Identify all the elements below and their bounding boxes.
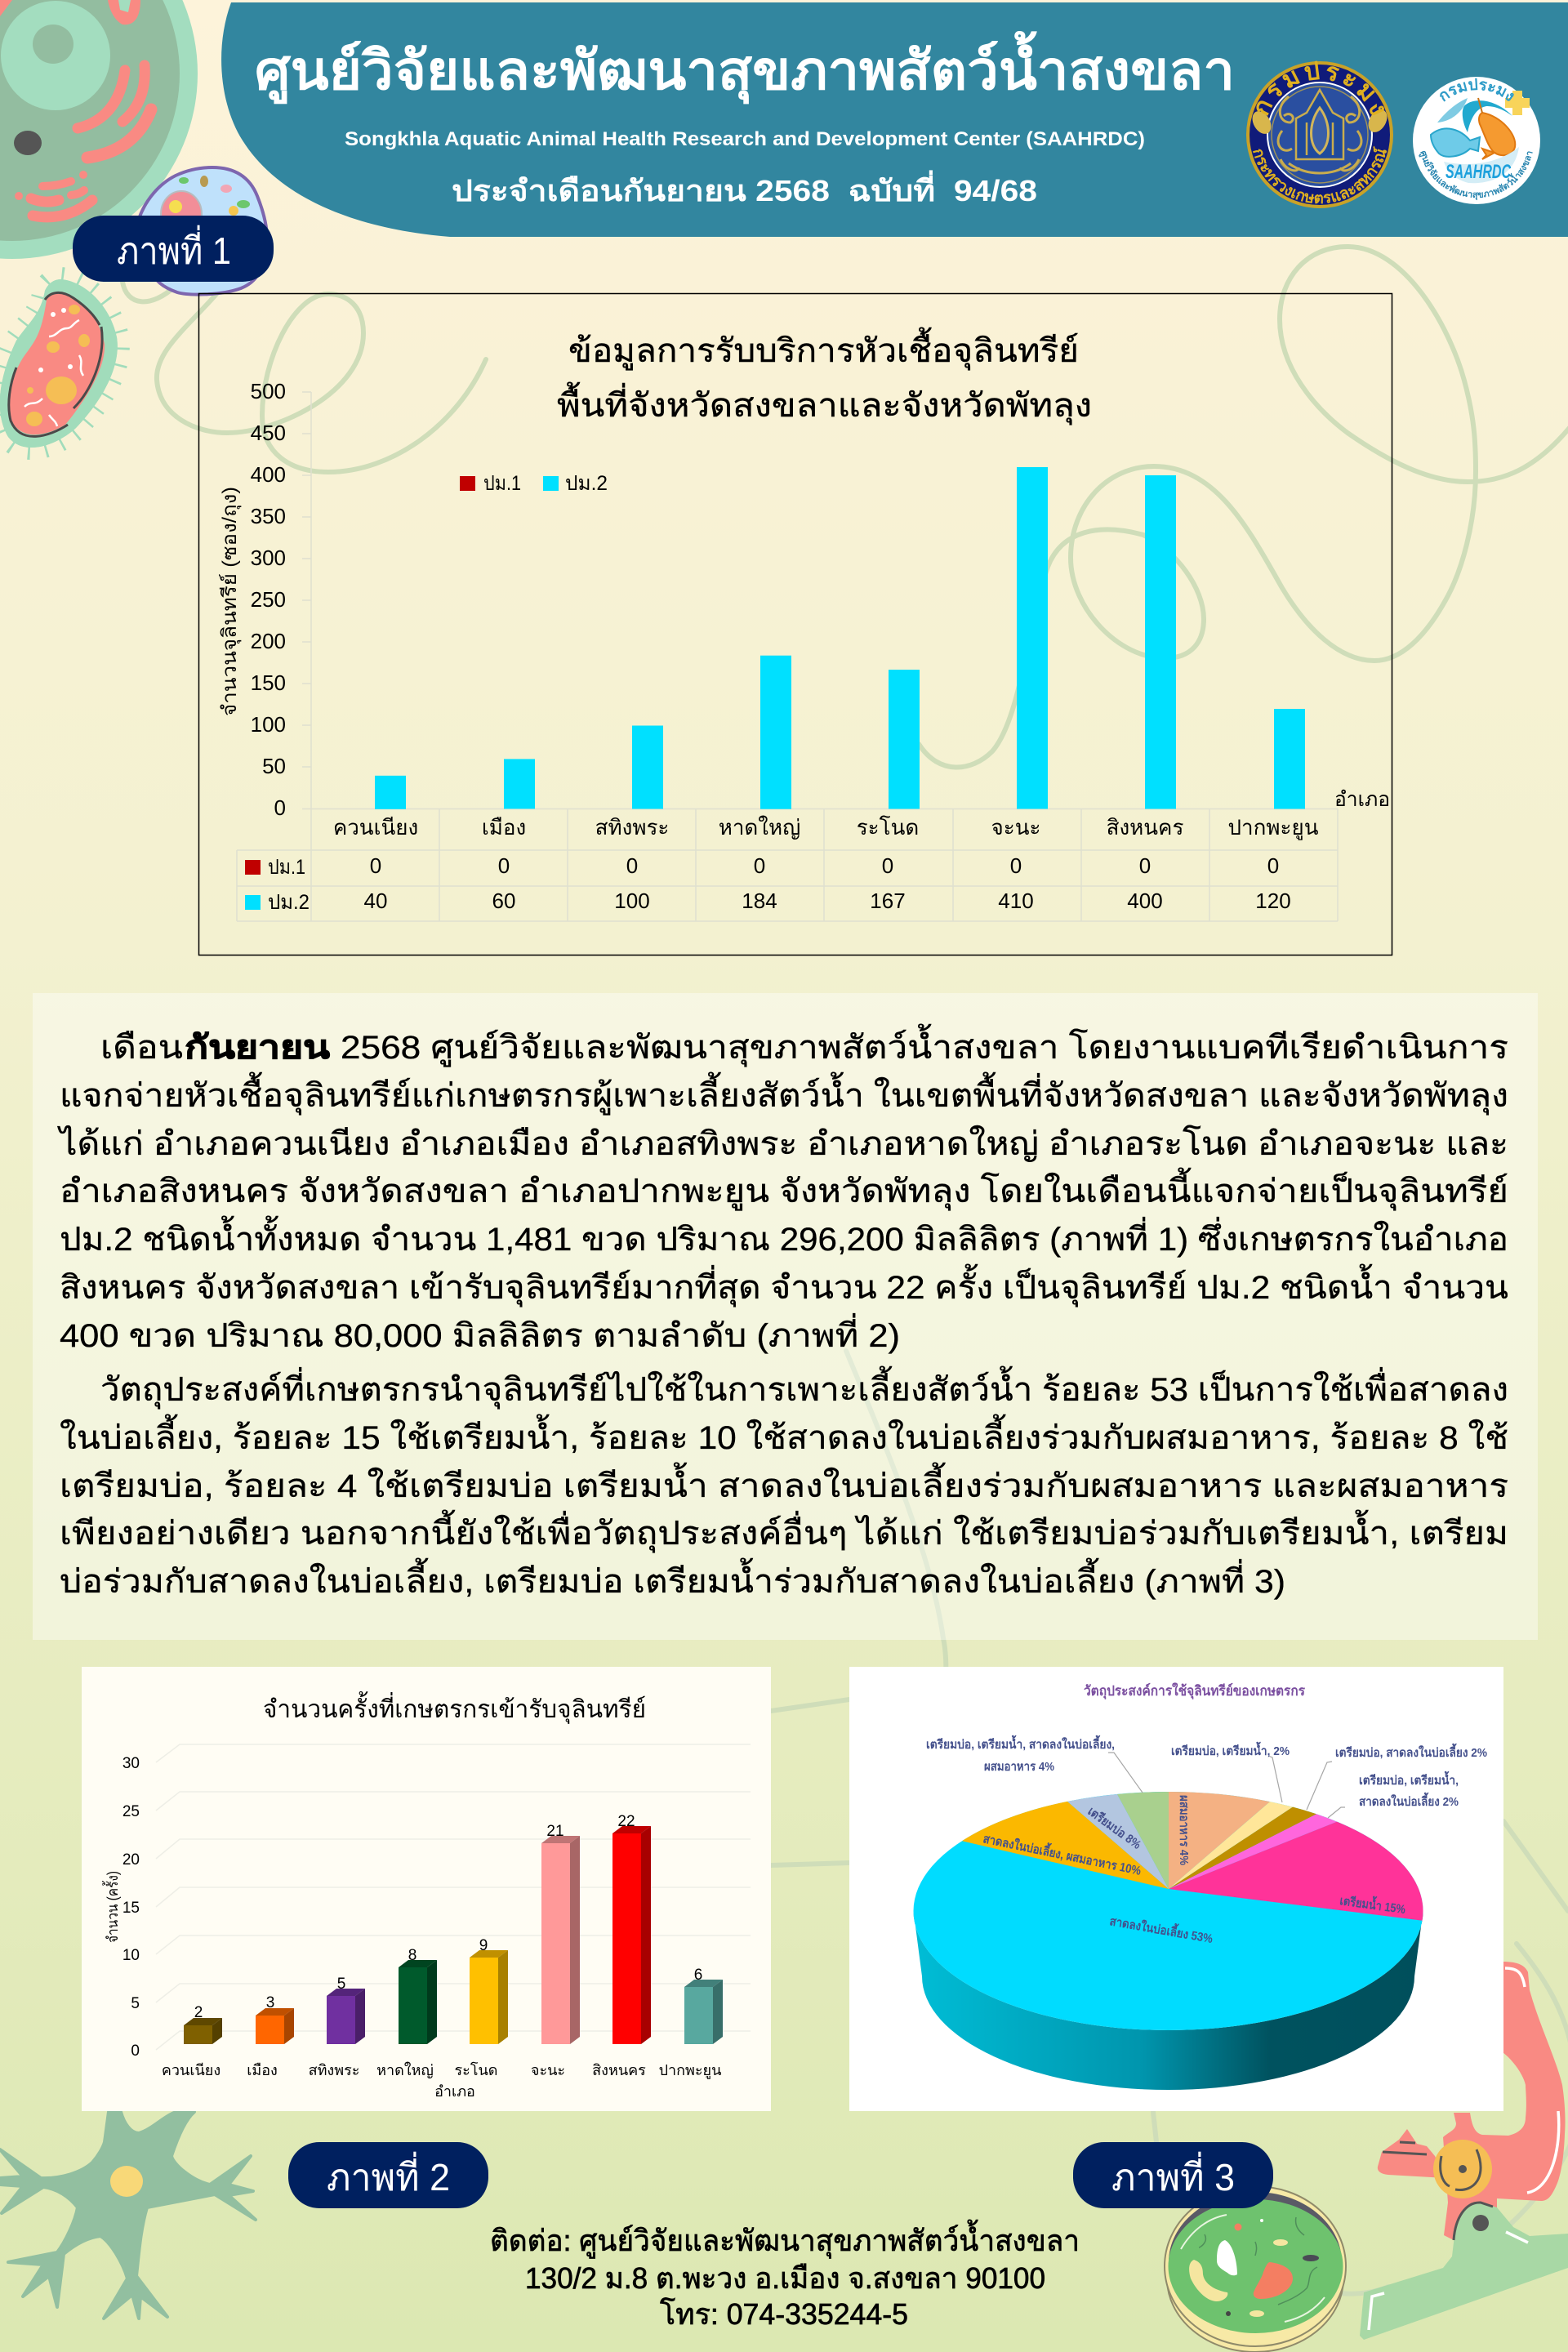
- badge: figure 1: [73, 216, 274, 282]
- logo: SAAHRDC: [1413, 77, 1540, 204]
- paragraph 1: 400 ขวด ปริมาณ 80,000 มิลลิลิตร ตามลำดับ (ภาพที่ 2): [60, 1313, 900, 1354]
- value labels: 2: [194, 2004, 203, 2021]
- logo: department of fisheries: กระทรวงเกษตรและสหกรณ์: [1253, 145, 1387, 204]
- bar: หาดใหญ่ 8: [399, 1960, 437, 2044]
- value labels: 8: [408, 1947, 416, 1964]
- panel: narrative text: [33, 993, 1538, 1640]
- bar: จะนะ 21: [541, 1836, 580, 2044]
- data table: ระโนด: [857, 815, 919, 840]
- paragraph 2: บ่อร่วมกับสาดลงในบ่อเลี้ยง, เตรียมบ่อ เตรียมน้ำร่วมกับสาดลงในบ่อเลี้ยง (ภาพที่ 3): [60, 1557, 1285, 1600]
- y axis labels: 250: [251, 587, 286, 612]
- chart title: พื้นที่จังหวัดสงขลาและจังหวัดพัทลุง: [557, 381, 1092, 425]
- y axis labels: 0: [274, 795, 286, 820]
- category labels: ควนเนียง: [162, 2062, 220, 2078]
- chart title: จำนวนครั้งที่เกษตรกรเข้ารับจุลินทรีย์: [263, 1691, 646, 1725]
- data table: 100: [614, 889, 650, 913]
- panel: service bar chart: [199, 294, 1392, 956]
- paragraph 2: เตรียมบ่อ, ร้อยละ 4 ใช้เตรียมบ่อ เตรียมน้ำ สาดลงในบ่อเลี้ยงร่วมกับผสมอาหาร และผสมอาหาร: [60, 1462, 1508, 1504]
- data table: 410: [998, 889, 1034, 913]
- y axis labels: [122, 1755, 140, 2060]
- logo: SAAHRDC: SAAHRDC: [1446, 161, 1511, 183]
- panel: visits bar chart: [82, 1667, 771, 2111]
- y axis labels: [251, 379, 286, 820]
- data table: จะนะ: [991, 815, 1040, 840]
- data table: ปากพะยูน: [1228, 815, 1319, 840]
- x axis unit label: อำเภอ: [1334, 788, 1390, 811]
- paragraph 1: 2568 ศูนย์วิจัยและพัฒนาสุขภาพสัตว์น้ำสงขลา โดยงานแบคทีเรียดำเนินการ: [341, 1023, 1508, 1067]
- y axis labels: 450: [251, 421, 286, 445]
- decorative petri dish: [1165, 2186, 1346, 2352]
- badge: figure 2: ภาพที่ 2: [327, 2151, 450, 2198]
- panel: purpose 3D pie chart: [849, 1667, 1503, 2111]
- y axis labels: 200: [251, 629, 286, 653]
- pie labels: เตรียมบ่อ, เตรียมน้ำ,: [1359, 1771, 1459, 1788]
- y axis labels: 500: [251, 379, 286, 403]
- data table: สิงหนคร: [1107, 815, 1183, 840]
- decorative cell top-left: [0, 0, 198, 259]
- pie labels: เตรียมบ่อ, เตรียมน้ำ, 2%: [1171, 1741, 1290, 1758]
- y axis labels: 20: [122, 1851, 140, 1869]
- data table: 120: [1255, 889, 1291, 913]
- decorative microscope: [1360, 1962, 1568, 2340]
- bar: ควนเนียง 2: [184, 2018, 222, 2044]
- category labels: [162, 2061, 721, 2100]
- header banner: [221, 2, 1568, 237]
- y axis title: จำนวนจุลินทรีย์ (ซอง/ถุง): [218, 487, 242, 716]
- bar: ปากพะยูน 6: [684, 1980, 723, 2044]
- data table: 0: [754, 853, 765, 878]
- paragraph 1: อำเภอสิงหนคร จังหวัดสงขลา อำเภอปากพะยูน จังหวัดพัทลุง โดยในเดือนนี้แจกจ่ายเป็นจุลินทรีย์: [60, 1167, 1508, 1211]
- y axis labels: 0: [131, 2042, 140, 2060]
- logo: SAAHRDC: ศูนย์วิจัยและพัฒนาสุขภาพสัตว์น้ำสงขลา: [1419, 150, 1533, 201]
- pie labels: เตรียมบ่อ, เตรียมน้ำ, สาดลงในบ่อเลี้ยง,: [926, 1735, 1115, 1752]
- logo: department of fisheries: กรมประมง: [1256, 60, 1384, 116]
- grid lines: [156, 1744, 751, 2050]
- contact information: โทร: 074-335244-5: [660, 2297, 908, 2331]
- value labels: 9: [479, 1937, 488, 1954]
- data table: สทิงพระ: [595, 815, 669, 840]
- value labels: 21: [546, 1823, 564, 1840]
- pie labels: [926, 1735, 1487, 1946]
- panel: service bar chart: ปม.1: [268, 856, 305, 879]
- legend: [460, 472, 608, 495]
- legend: ปม.2: [565, 472, 608, 495]
- decorative neuron: [0, 2112, 256, 2319]
- data table: [333, 815, 1319, 913]
- bar: สทิงพระ 5: [327, 1989, 365, 2044]
- category labels: อำเภอ: [434, 2083, 475, 2100]
- data table: 0: [1010, 853, 1022, 878]
- category labels: เมือง: [247, 2062, 278, 2078]
- data table: 167: [870, 889, 906, 913]
- issue line: ประจำเดือนกันยายน 2568 ฉบับที่ 94/68: [452, 170, 1037, 207]
- y axis labels: 50: [262, 754, 286, 778]
- paragraph 1: ปม.2 ชนิดน้ำทั้งหมด จำนวน 1,481 ขวด ปริมาณ 296,200 มิลลิลิตร (ภาพที่ 1) ซึ่งเกษตรกรในอำเภอ: [60, 1215, 1508, 1258]
- pie labels: สาดลงในบ่อเลี้ยง, ผสมอาหาร 10%: [982, 1829, 1143, 1878]
- y axis labels: 15: [122, 1900, 140, 1917]
- pie labels: ผสมอาหาร 4%: [1177, 1795, 1191, 1865]
- badge: figure 3: [1073, 2142, 1273, 2208]
- pie title: วัตถุประสงค์การใช้จุลินทรีย์ของเกษตรกร: [1084, 1682, 1306, 1699]
- pie side wall: [913, 1911, 1423, 2090]
- pie labels: สาดลงในบ่อเลี้ยง 53%: [1108, 1911, 1214, 1946]
- y axis labels: 350: [251, 504, 286, 528]
- y axis labels: 10: [122, 1947, 140, 1964]
- paragraph 2: ในบ่อเลี้ยง, ร้อยละ 15 ใช้เตรียมน้ำ, ร้อยละ 10 ใช้สาดลงในบ่อเลี้ยงร่วมกับผสมอาหาร, ร้อยละ 8 ใช้: [60, 1414, 1508, 1456]
- y axis labels: 300: [251, 546, 286, 570]
- bar: เมือง 3: [256, 2008, 294, 2044]
- value labels: 3: [266, 1994, 274, 2011]
- decorative small cell behind badge: [137, 167, 267, 295]
- category labels: หาดใหญ่: [376, 2061, 434, 2078]
- value labels: 5: [337, 1976, 345, 1993]
- pie labels: ผสมอาหาร 4%: [984, 1760, 1054, 1774]
- bar: สิงหนคร 22: [612, 1826, 651, 2044]
- y axis labels: 5: [131, 1995, 140, 2012]
- data table: 0: [1267, 853, 1279, 878]
- chart title: ข้อมูลการรับบริการหัวเชื้อจุลินทรีย์: [568, 327, 1079, 371]
- contact information: 130/2 ม.8 ต.พะวง อ.เมือง จ.สงขลา 90100: [525, 2261, 1045, 2295]
- paragraph 2: เพียงอย่างเดียว นอกจากนี้ยังใช้เพื่อวัตถุประสงค์อื่นๆ ได้แก่ ใช้เตรียมบ่อร่วมกับเตรียมน้ำ, เตรียม: [60, 1509, 1508, 1553]
- value labels: [194, 1813, 702, 2021]
- bars: ปม.2: [375, 467, 1305, 809]
- value labels: 6: [694, 1967, 702, 1984]
- paragraph 1: กันยายน: [185, 1030, 330, 1066]
- category labels: จะนะ: [531, 2062, 565, 2078]
- data table: 0: [370, 853, 381, 878]
- axis lines and table grid: [237, 392, 1338, 921]
- data table: 184: [742, 889, 777, 913]
- paragraph 2: วัตถุประสงค์ที่เกษตรกรนำจุลินทรีย์ไปใช้ในการเพาะเลี้ยงสัตว์น้ำ ร้อยละ 53 เป็นการใช้เพื่อสาดลง: [100, 1365, 1508, 1410]
- paragraph 1: แจกจ่ายหัวเชื้อจุลินทรีย์แก่เกษตรกรผู้เพาะเลี้ยงสัตว์น้ำ ในเขตพื้นที่จังหวัดสงขลา และจังหวัดพัทลุง: [60, 1071, 1508, 1116]
- logo: department of fisheries: [1246, 60, 1393, 208]
- data table: เมือง: [482, 815, 526, 840]
- y axis labels: 100: [251, 712, 286, 737]
- data table: ควนเนียง: [333, 815, 418, 840]
- pie labels: เตรียมบ่อ 8%: [1085, 1804, 1143, 1852]
- y axis labels: 30: [122, 1755, 140, 1772]
- y axis labels: 150: [251, 670, 286, 695]
- badge: figure 1: ภาพที่ 1: [117, 225, 231, 272]
- bar: ระโนด 9: [470, 1950, 508, 2044]
- data table: 0: [498, 853, 510, 878]
- legend: ปม.1: [483, 472, 521, 495]
- leader lines: [1108, 1753, 1345, 1818]
- paragraph 1: สิงหนคร จังหวัดสงขลา เข้ารับจุลินทรีย์มากที่สุด จำนวน 22 ครั้ง เป็นจุลินทรีย์ ปม.2 ชนิดน้ำ จำนวน: [60, 1263, 1508, 1307]
- category labels: สิงหนคร: [592, 2062, 646, 2078]
- panel: service bar chart: ปม.2: [268, 891, 310, 914]
- data table: หาดใหญ่: [719, 815, 800, 840]
- paragraph 1: ได้แก่ อำเภอควนเนียง อำเภอเมือง อำเภอสทิงพระ อำเภอหาดใหญ่ อำเภอระโนด อำเภอจะนะ และ: [57, 1125, 1508, 1162]
- pie labels: สาดลงในบ่อเลี้ยง 2%: [1359, 1792, 1459, 1809]
- y axis labels: 400: [251, 462, 286, 487]
- data table: 0: [626, 853, 638, 878]
- data table: 0: [1139, 853, 1151, 878]
- chart title: [557, 327, 1092, 425]
- pie labels: เตรียมน้ำ 15%: [1339, 1891, 1407, 1917]
- badge: figure 3: ภาพที่ 3: [1111, 2151, 1235, 2198]
- category labels: ปากพะยูน: [659, 2062, 721, 2079]
- y axis title: จำนวน (ครั้ง): [102, 1871, 121, 1943]
- paragraph 1: [57, 1023, 1508, 1354]
- category labels: ระโนด: [454, 2061, 498, 2078]
- header subtitle: Songkhla Aquatic Animal Health Research and Development Center (SAAHRDC): [345, 128, 1145, 150]
- contact information: ติดต่อ: ศูนย์วิจัยและพัฒนาสุขภาพสัตว์น้ำสงขลา: [490, 2219, 1080, 2259]
- contact information: [490, 2219, 1080, 2331]
- paragraph 1: เดือน: [100, 1030, 183, 1066]
- pie slices: [913, 1792, 1423, 2030]
- data table: 400: [1127, 889, 1163, 913]
- category labels: สทิงพระ: [309, 2062, 359, 2078]
- data table: 60: [492, 889, 515, 913]
- y axis labels: 25: [122, 1803, 140, 1820]
- value labels: 22: [617, 1813, 635, 1830]
- logo: SAAHRDC: กรมประมง: [1440, 78, 1514, 101]
- header title: ศูนย์วิจัยและพัฒนาสุขภาพสัตว์น้ำสงขลา: [255, 30, 1235, 105]
- data table: 40: [364, 889, 387, 913]
- decorative bacterium: [0, 279, 118, 448]
- data table: 0: [882, 853, 893, 878]
- badge: figure 2: [288, 2142, 488, 2208]
- paragraph 2: [60, 1365, 1508, 1600]
- pie labels: เตรียมบ่อ, สาดลงในบ่อเลี้ยง 2%: [1335, 1743, 1487, 1760]
